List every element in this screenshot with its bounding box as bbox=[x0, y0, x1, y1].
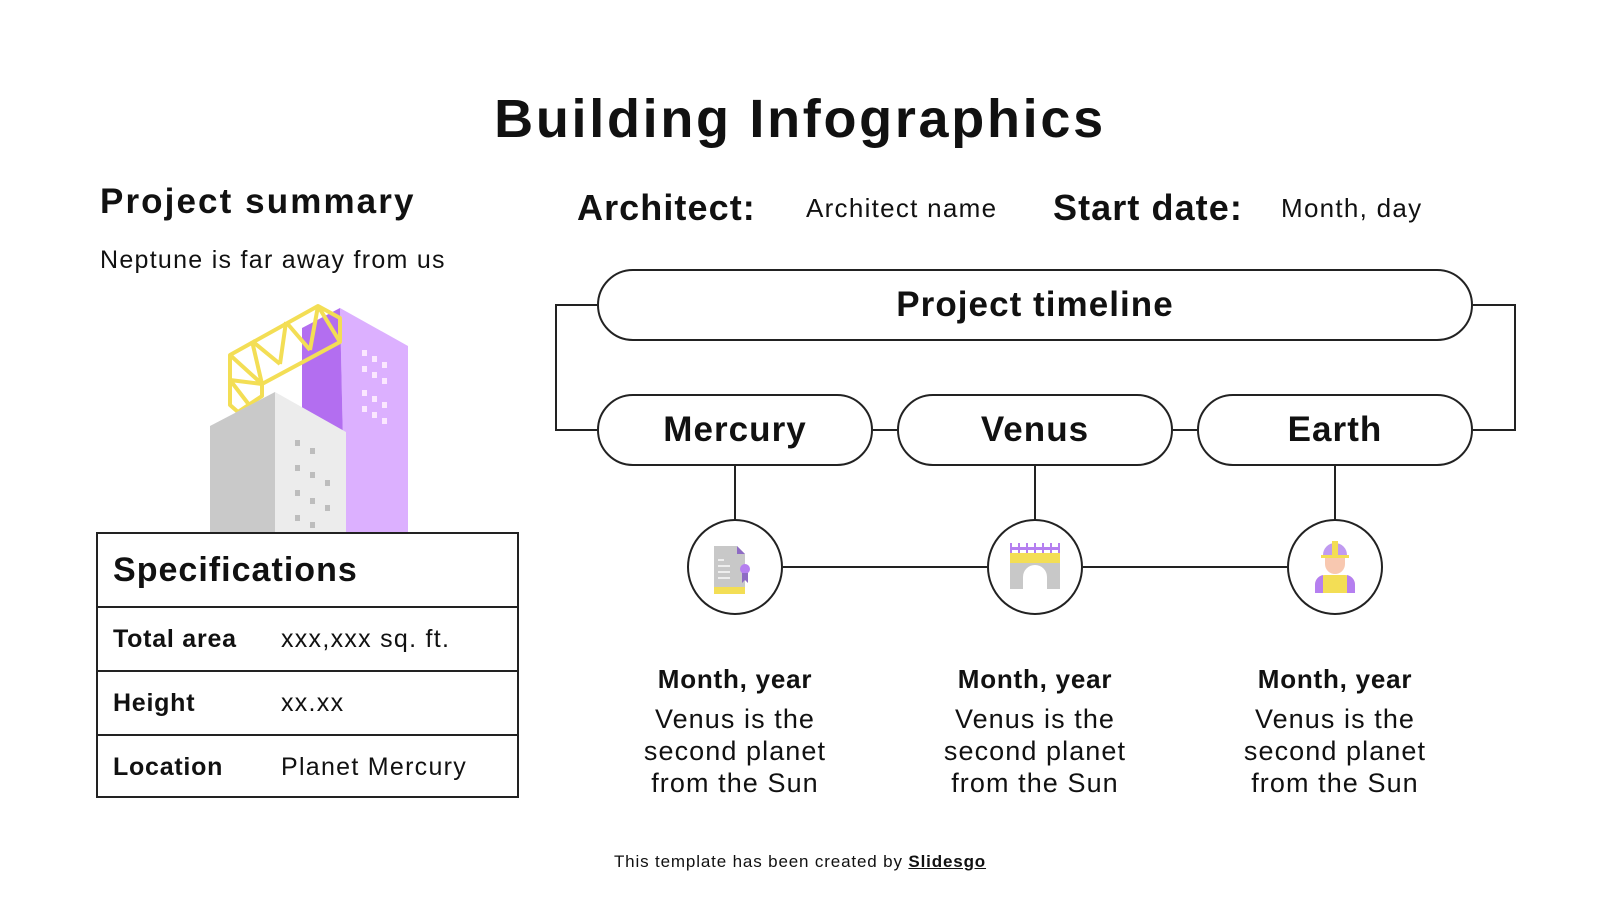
start date value: Month, day bbox=[1281, 193, 1422, 223]
caption 2 bbox=[944, 664, 1126, 798]
heading: project summary: Project summary bbox=[100, 182, 416, 221]
row: location bbox=[113, 753, 467, 781]
table header bbox=[98, 534, 517, 608]
illustration: buildings bbox=[210, 304, 408, 532]
row: total area: xxx,xxx sq. ft. bbox=[281, 625, 450, 653]
pill: Earth: Earth bbox=[1288, 410, 1382, 449]
icon: document bbox=[687, 519, 783, 615]
caption 3: from the Sun bbox=[1251, 768, 1419, 798]
icon: bridge bbox=[987, 519, 1083, 615]
row: total area bbox=[98, 608, 517, 672]
caption 1 bbox=[644, 664, 826, 798]
caption 3 bbox=[1244, 664, 1426, 798]
row: height bbox=[98, 672, 517, 736]
caption 2: second planet bbox=[944, 736, 1126, 766]
caption 1: second planet bbox=[644, 736, 826, 766]
timeline header pill: Project timeline bbox=[896, 285, 1174, 324]
title: Building Infographics bbox=[494, 89, 1106, 149]
timeline header pill bbox=[597, 269, 1473, 341]
pill: Venus bbox=[897, 394, 1173, 466]
caption 3: Month, year bbox=[1258, 664, 1412, 694]
start date label: Start date: bbox=[1053, 187, 1243, 228]
footer credit: This template has been created by Slidesgo bbox=[614, 852, 986, 871]
caption 3: Venus is the bbox=[1255, 704, 1415, 734]
caption 1: from the Sun bbox=[651, 768, 819, 798]
row: height: xx.xx bbox=[281, 689, 344, 717]
caption 2: Venus is the bbox=[955, 704, 1115, 734]
caption 1: Month, year bbox=[658, 664, 812, 694]
caption 1: Venus is the bbox=[655, 704, 815, 734]
caption 3: second planet bbox=[1244, 736, 1426, 766]
architect name: Architect name bbox=[806, 193, 997, 223]
pill: Mercury bbox=[597, 394, 873, 466]
row: location: Planet Mercury bbox=[281, 753, 467, 781]
icon: worker bbox=[1287, 519, 1383, 615]
architect label: Architect: bbox=[577, 187, 756, 228]
caption 2: Month, year bbox=[958, 664, 1112, 694]
specifications table bbox=[96, 532, 519, 798]
pill: Mercury: Mercury bbox=[663, 410, 807, 449]
pill: Venus: Venus bbox=[981, 410, 1089, 449]
row: total area: Total area bbox=[113, 625, 237, 653]
table header: Specifications bbox=[113, 551, 358, 589]
caption 2: from the Sun bbox=[951, 768, 1119, 798]
text: summary: Neptune is far away from us bbox=[100, 246, 446, 274]
row: location: Location bbox=[113, 753, 223, 781]
pill: Earth bbox=[1197, 394, 1473, 466]
row: height: Height bbox=[113, 689, 195, 717]
